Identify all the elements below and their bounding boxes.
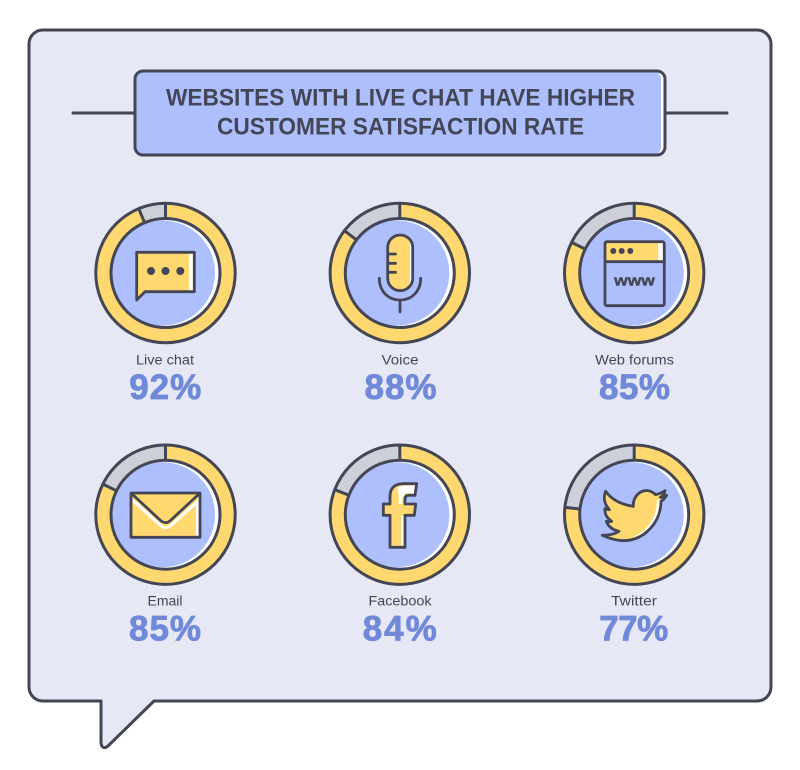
panel: email xyxy=(96,445,235,649)
donut chart: twitter 77% xyxy=(564,445,704,584)
value: 92% xyxy=(129,368,201,407)
panel: facebook xyxy=(330,445,469,649)
donut chart: live chat 92% xyxy=(96,203,235,343)
panel: live chat xyxy=(96,203,235,407)
donut chart: facebook 84% xyxy=(330,445,470,584)
title banner: WEBSITES WITH LIVE CHAT HAVE HIGHER xyxy=(166,85,635,112)
label: Web forums xyxy=(595,352,674,367)
panel: web forums xyxy=(564,203,704,407)
icon: facebook f xyxy=(383,484,417,547)
donut chart: voice 88% xyxy=(330,203,470,343)
label: Twitter xyxy=(611,594,658,609)
title banner: CUSTOMER SATISFACTION RATE xyxy=(217,114,584,141)
icon: envelope xyxy=(131,493,200,537)
value: 88% xyxy=(364,368,436,407)
label: Live chat xyxy=(136,352,194,367)
icon: browser window: www xyxy=(613,273,655,290)
icon: microphone xyxy=(379,235,421,312)
title banner xyxy=(73,71,727,155)
value: 85% xyxy=(129,610,201,649)
panel: twitter xyxy=(564,445,704,649)
donut chart: web forums 85% xyxy=(564,203,704,343)
icon: chat bubble xyxy=(137,252,194,300)
label: Voice xyxy=(382,352,418,367)
value: 84% xyxy=(363,610,437,649)
panel: voice xyxy=(330,203,469,407)
label: Email xyxy=(148,594,182,609)
label: Facebook xyxy=(368,594,432,609)
value: 77% xyxy=(599,610,668,649)
donut chart: email 85% xyxy=(96,445,235,584)
icon: twitter bird xyxy=(602,491,667,541)
value: 85% xyxy=(599,368,670,407)
icon: browser window xyxy=(605,242,664,306)
